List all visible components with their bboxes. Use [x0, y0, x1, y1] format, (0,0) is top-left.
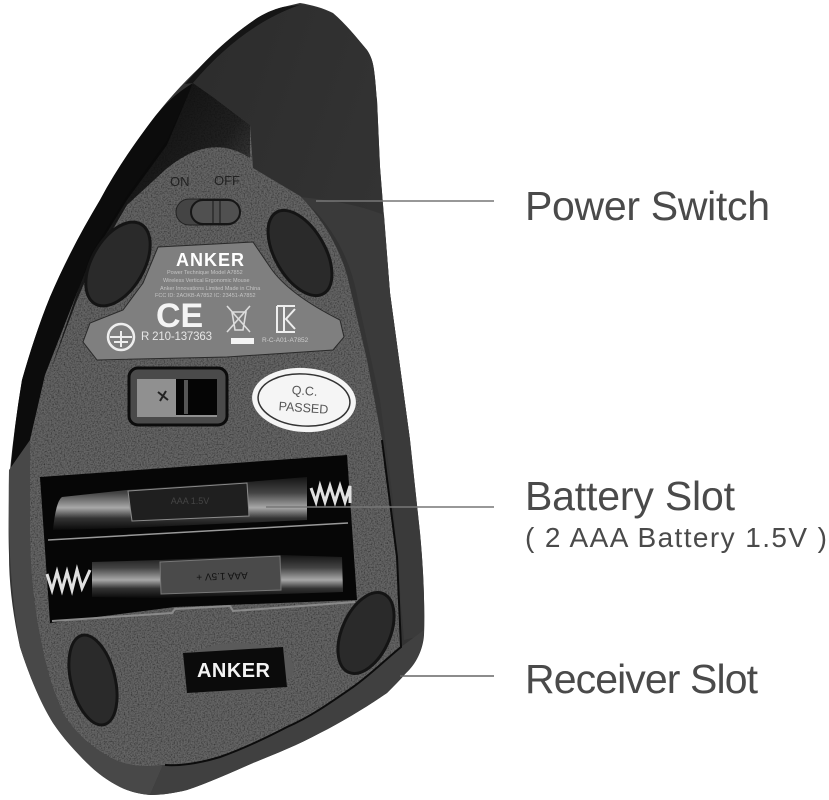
lower battery [47, 555, 343, 598]
power switch: OFF [214, 173, 240, 188]
side strip [300, 197, 424, 640]
lower battery: AAA 1.5V + [196, 569, 248, 582]
certification number: R 210-137363 [141, 331, 212, 343]
recycling bin mark [227, 306, 250, 332]
upper battery: AAA 1.5V [171, 496, 209, 506]
KC mark [277, 306, 295, 332]
leader line: power switch [316, 200, 494, 202]
label plate: FCC ID: 2AOKB-A7852 IC: 23451-A7852 [155, 293, 256, 299]
battery compartment [40, 455, 357, 623]
lower right rim [150, 630, 424, 795]
lower spring [47, 570, 90, 590]
label plate: Power Technique Model A7852 [167, 270, 243, 276]
QC sticker: PASSED [278, 399, 329, 417]
textured base [30, 83, 401, 766]
label: battery specification: ( 2 AAA Battery 1.5V ) [525, 522, 827, 553]
compartment lip [52, 602, 355, 621]
top edge highlight [185, 5, 300, 84]
brand on plate: ANKER [176, 250, 244, 270]
power switch [170, 173, 240, 225]
dark shading on upper base [50, 83, 250, 372]
rubber feet [61, 200, 405, 730]
label plate: Anker Innovations Limited Made in China [160, 286, 261, 292]
ON and OFF marks: ON [170, 174, 190, 189]
QC sticker [250, 364, 358, 436]
label: receiver slot: Receiver Slot [525, 656, 759, 702]
label: battery slot: Battery Slot [525, 473, 736, 519]
CE mark: CE [156, 297, 203, 335]
mouse underside [9, 3, 424, 795]
label plate [83, 242, 344, 360]
certification mark [108, 324, 134, 350]
USB receiver: ANKER [197, 660, 271, 682]
lower left rim [9, 440, 163, 795]
label plate: R-C-A01-A7852 [262, 337, 309, 344]
sensor window [129, 368, 227, 425]
label: power switch: Power Switch [525, 183, 770, 229]
leader line: battery slot [266, 506, 494, 508]
label plate: Wireless Vertical Ergonomic Mouse [163, 278, 250, 284]
upper battery [53, 477, 350, 530]
top panel [193, 5, 410, 647]
compartment divider [48, 523, 348, 540]
USB receiver [182, 643, 294, 693]
leader line: receiver slot [400, 675, 494, 677]
black left grip [10, 83, 213, 480]
upper spring [311, 486, 350, 503]
QC sticker: Q.C. [291, 383, 318, 399]
outer silhouette [9, 3, 424, 795]
